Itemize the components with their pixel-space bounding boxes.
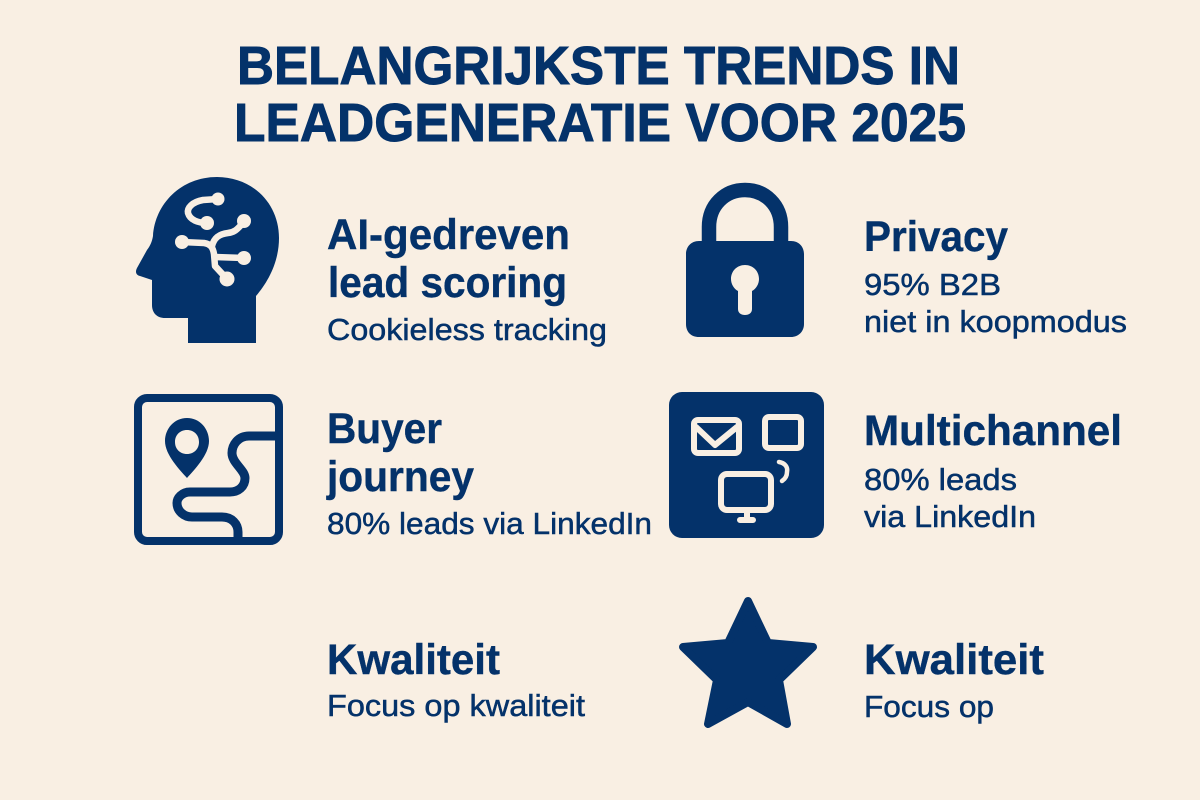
title: BELANGRIJKSTE TRENDS IN: [237, 36, 960, 96]
text: Kwaliteit right: Kwaliteit: [864, 636, 1044, 684]
text: Privacy: [864, 213, 1127, 339]
text: Buyer journey: [326, 405, 652, 541]
icon: map with route and pin: [138, 398, 279, 541]
text: Multichannel: Multichannel: [864, 407, 1122, 455]
text: Kwaliteit left: Kwaliteit: [327, 636, 500, 684]
icon: head with circuit brain: [136, 177, 279, 343]
title: LEADGENERATIE VOOR 2025: [234, 93, 966, 153]
text: Buyer journey: 80% leads via LinkedIn: [327, 506, 652, 541]
text: Kwaliteit left: Focus op kwaliteit: [327, 688, 585, 723]
icon: padlock: [686, 190, 804, 337]
text: AI-gedreven lead scoring: Cookieless tracking: [327, 312, 607, 347]
text: AI-gedreven lead scoring: lead scoring: [328, 259, 567, 307]
text: Privacy: Privacy: [864, 213, 1008, 261]
text: AI-gedreven lead scoring: [327, 211, 607, 347]
text: Kwaliteit right: [864, 636, 1044, 724]
text: Buyer journey: journey: [326, 453, 474, 501]
title: [234, 36, 966, 153]
icon: multichannel devices: [669, 392, 824, 538]
text: Multichannel: via LinkedIn: [864, 499, 1036, 534]
text: Privacy: niet in koopmodus: [864, 304, 1127, 339]
text: Kwaliteit left: [327, 636, 585, 723]
text: Kwaliteit right: Focus op: [864, 689, 994, 724]
text: AI-gedreven lead scoring: AI-gedreven: [327, 211, 570, 259]
text: Multichannel: 80% leads: [864, 462, 1017, 497]
icon: star: [683, 601, 813, 724]
text: Buyer journey: Buyer: [327, 405, 442, 453]
text: Privacy: 95% B2B: [864, 267, 1001, 302]
text: Multichannel: [864, 407, 1122, 534]
